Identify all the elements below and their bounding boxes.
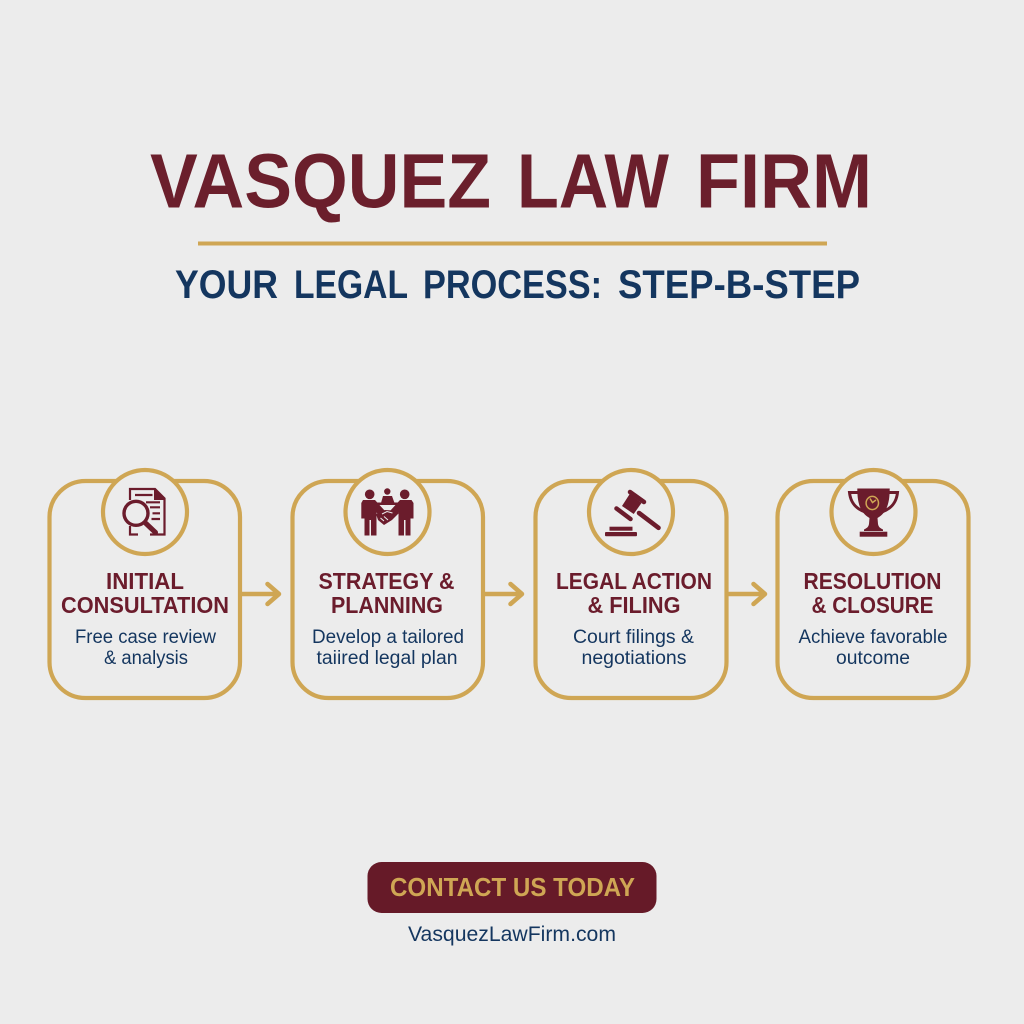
left figure bbox=[361, 490, 385, 536]
title: LAW bbox=[517, 138, 669, 224]
panel: step 1 initial consultation bbox=[50, 470, 240, 698]
icon circle 2 bbox=[346, 470, 430, 554]
arrow: step 2 to step 3 bbox=[485, 584, 522, 604]
step 3 description bbox=[573, 627, 694, 669]
step 4 description: Achieve favorable bbox=[798, 627, 948, 648]
card outline 2 bbox=[292, 481, 483, 698]
step 2 heading bbox=[318, 568, 454, 618]
arrow: step 3 to step 4 bbox=[729, 584, 765, 604]
panel: step 3 legal action and filing bbox=[536, 470, 726, 698]
button: contact us today bbox=[368, 862, 656, 913]
handshake bbox=[376, 510, 399, 525]
title: FIRM bbox=[696, 138, 872, 224]
step 3 heading: LEGAL ACTION bbox=[556, 568, 712, 594]
seated figure behind table bbox=[376, 488, 398, 505]
step 2 description: Develop a tailored bbox=[312, 627, 464, 648]
panel: step 4 resolution and closure bbox=[778, 470, 968, 698]
icon circle 3 bbox=[589, 470, 673, 554]
step 4 description: outcome bbox=[836, 648, 910, 669]
panel: step 2 strategy and planning bbox=[292, 470, 483, 698]
subtitle: PROCESS: bbox=[423, 263, 602, 307]
step 1 heading: CONSULTATION bbox=[61, 592, 229, 618]
card outline 1 bbox=[50, 481, 240, 698]
right figure bbox=[390, 490, 414, 536]
step 2 description bbox=[312, 627, 464, 669]
step 4 heading: & CLOSURE bbox=[812, 592, 934, 618]
icon: document with magnifier bbox=[124, 488, 166, 534]
icon: people shaking hands bbox=[361, 488, 414, 536]
subtitle bbox=[175, 263, 860, 307]
icon circle 4 bbox=[832, 470, 916, 554]
title: VASQUEZ bbox=[150, 138, 491, 224]
step 1 description bbox=[75, 627, 216, 669]
step 2 heading: STRATEGY & bbox=[318, 568, 454, 594]
step 1 description: Free case review bbox=[75, 627, 216, 648]
subtitle: LEGAL bbox=[294, 263, 408, 307]
step 4 description bbox=[798, 627, 948, 669]
icon: gavel bbox=[605, 492, 658, 536]
step 3 heading bbox=[556, 568, 712, 618]
step 3 description: negotiations bbox=[582, 648, 686, 669]
card outline 4 bbox=[778, 481, 968, 698]
subtitle: STEP-B-STEP bbox=[618, 263, 860, 307]
arrow: step 1 to step 2 bbox=[242, 584, 279, 604]
icon circle 1 bbox=[103, 470, 187, 554]
step 2 heading: PLANNING bbox=[331, 592, 443, 618]
subtitle: YOUR bbox=[175, 263, 278, 307]
step 1 description: & analysis bbox=[104, 648, 188, 669]
icon: trophy bbox=[850, 488, 898, 537]
step 1 heading: INITIAL bbox=[106, 568, 184, 594]
gold title rule bbox=[198, 242, 827, 246]
step 3 description: Court filings & bbox=[573, 627, 694, 648]
step 3 heading: & FILING bbox=[588, 592, 680, 618]
title bbox=[150, 138, 872, 224]
card outline 3 bbox=[536, 481, 726, 698]
website url: VasquezLawFirm.com bbox=[408, 923, 616, 946]
step 4 heading bbox=[804, 568, 942, 618]
step 4 heading: RESOLUTION bbox=[804, 568, 942, 594]
button: contact us today: CONTACT US TODAY bbox=[390, 872, 635, 902]
step 2 description: taiired legal plan bbox=[316, 648, 458, 669]
step 1 heading bbox=[61, 568, 229, 618]
